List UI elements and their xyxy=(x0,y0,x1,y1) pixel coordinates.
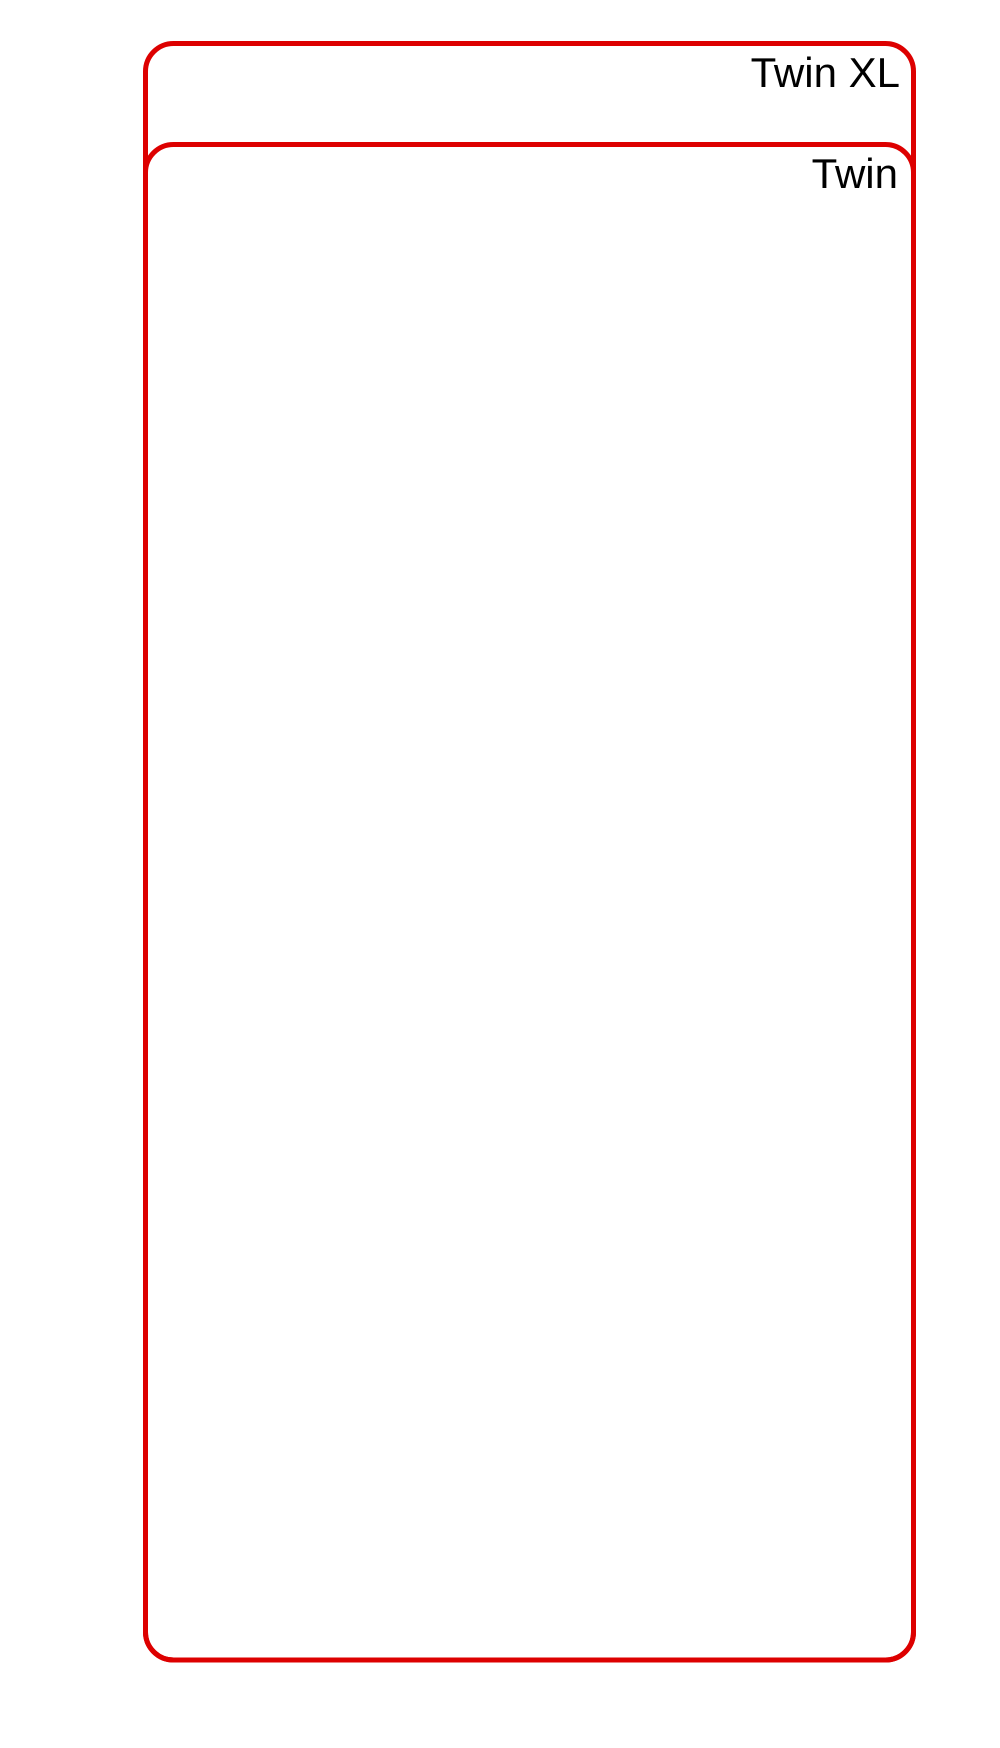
label: Twin: Twin xyxy=(812,150,898,197)
label: Twin XL: Twin XL xyxy=(751,49,900,96)
